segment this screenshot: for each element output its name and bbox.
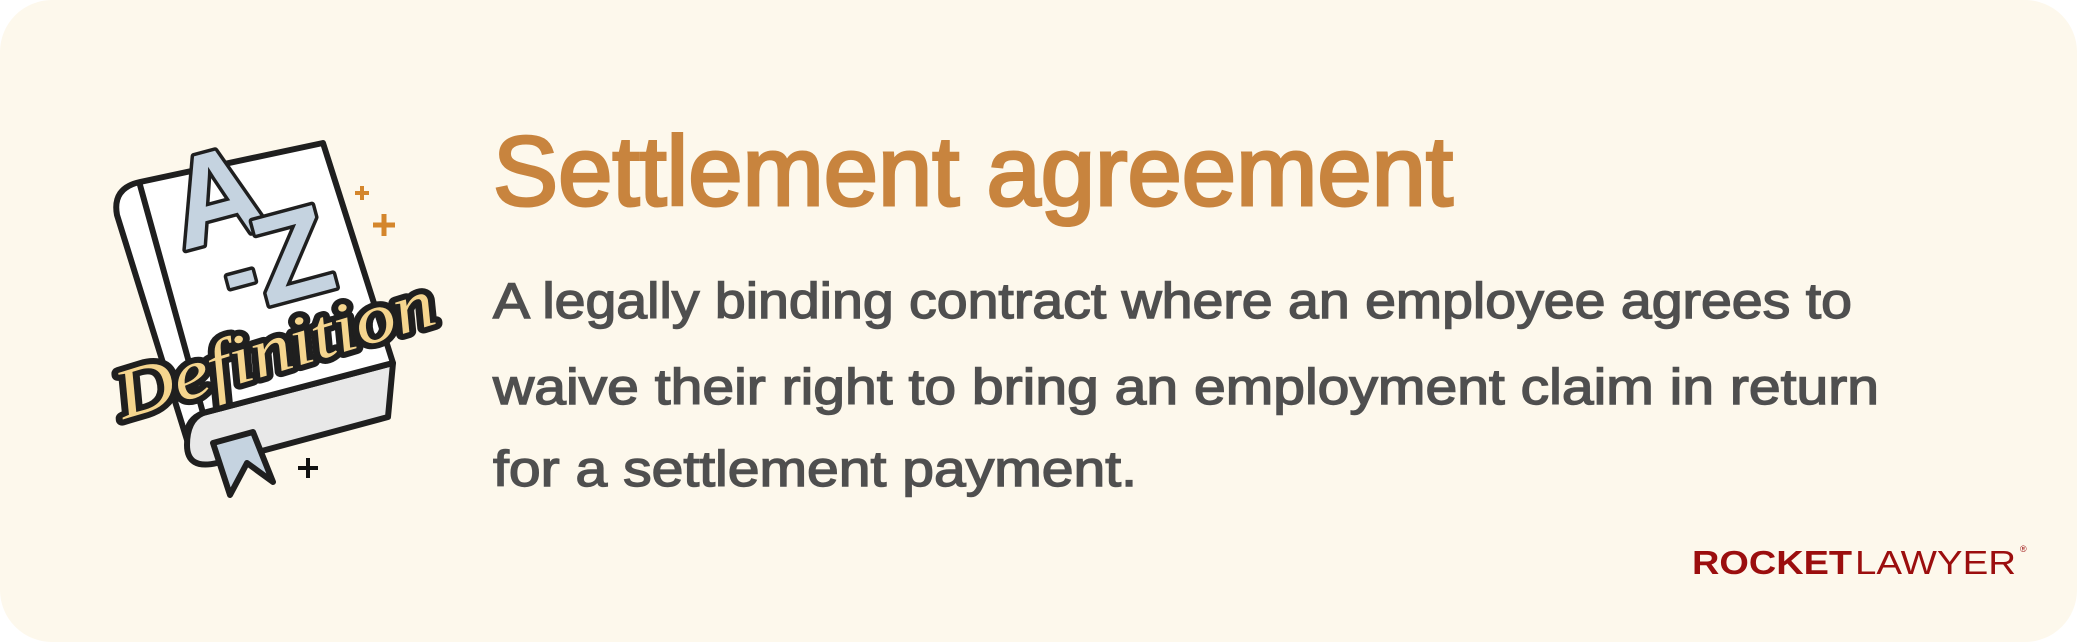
logo: Rocket Lawyer: ® bbox=[2020, 544, 2027, 554]
definition text: A legally binding contract where an employee agrees to bbox=[493, 273, 1852, 329]
letters A-Z bbox=[153, 116, 347, 332]
letters A-Z: - bbox=[208, 213, 270, 330]
book cover bbox=[116, 143, 393, 440]
definition text: for a settlement payment. bbox=[493, 441, 1137, 497]
definition text bbox=[492, 273, 1879, 497]
logo: Rocket Lawyer: LAWYER bbox=[1855, 544, 2016, 581]
icon: sparkles bbox=[298, 186, 395, 478]
letters A-Z: A bbox=[153, 116, 279, 278]
letters A-Z: Z bbox=[237, 178, 347, 332]
logo: Rocket Lawyer bbox=[1692, 544, 2027, 581]
definition text: waive their right to bring an employment claim in return bbox=[492, 359, 1879, 415]
book page block bbox=[187, 363, 393, 465]
script word Definition: Definition bbox=[105, 264, 444, 435]
icon: definition book bbox=[105, 116, 444, 495]
bookmark bbox=[213, 432, 273, 495]
title: Settlement agreement bbox=[493, 116, 1453, 226]
logo: Rocket Lawyer: ROCKET bbox=[1692, 544, 1852, 581]
